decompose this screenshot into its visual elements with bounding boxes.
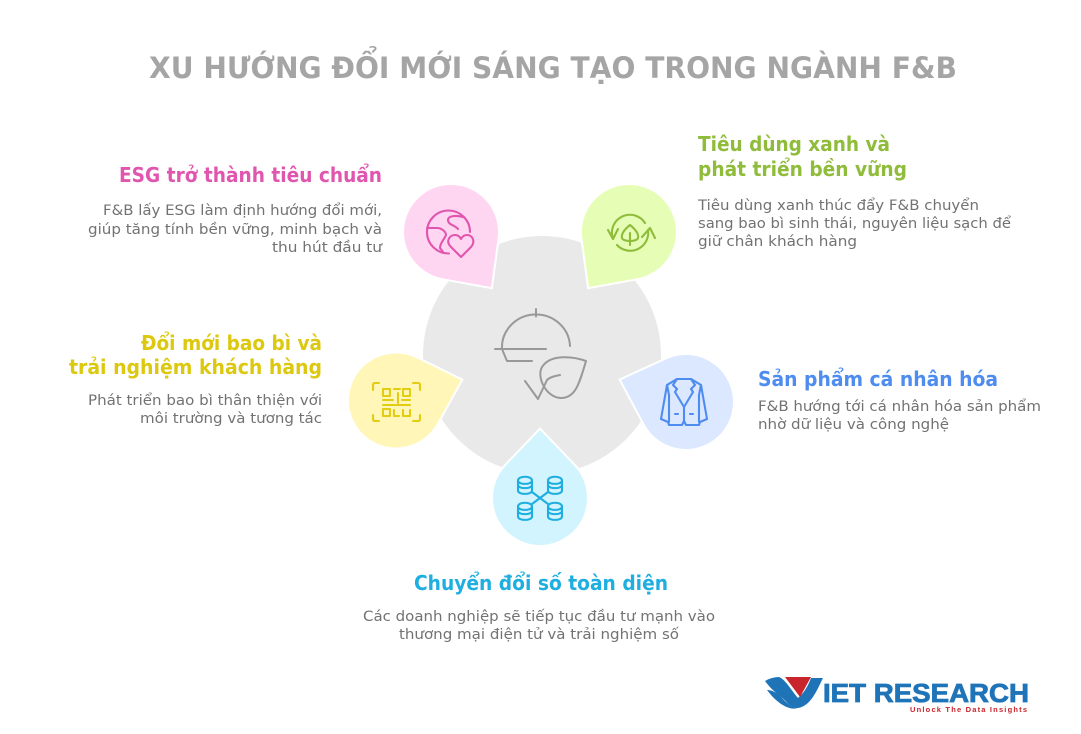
heading: Chuyển đổi số toàn diện [414, 571, 668, 595]
icon: QR code [373, 383, 420, 421]
logo wordmark: IET RESEARCH [823, 680, 1029, 708]
body text [697, 197, 1011, 250]
central grey circle [423, 236, 661, 474]
heading [69, 331, 322, 379]
heading: Tiêu dùng xanh và [698, 132, 890, 156]
body text [758, 398, 1041, 433]
body text: F&B lấy ESG làm định hướng đổi mới, [103, 202, 382, 219]
body text: giữ chân khách hàng [698, 234, 857, 250]
body text: giúp tăng tính bền vững, minh bạch và [88, 221, 382, 238]
body text [88, 392, 322, 427]
pink drop [404, 185, 498, 287]
heading: ESG trở thành tiêu chuẩn [119, 163, 382, 187]
heading: phát triển bền vững [698, 157, 907, 181]
panel: personalised products [621, 355, 1041, 449]
body text: môi trường và tương tác [140, 411, 322, 427]
yellow drop [349, 353, 461, 447]
green drop [582, 185, 676, 287]
body text: F&B hướng tới cá nhân hóa sản phẩm [758, 398, 1041, 415]
icon: globe with heart [427, 211, 473, 257]
title: XU HƯỚNG ĐỔI MỚI SÁNG TẠO TRONG NGÀNH F&B [149, 45, 957, 85]
logo mark [765, 677, 823, 709]
icon: connected databases [518, 477, 562, 520]
body text [88, 202, 383, 256]
cyan drop [493, 430, 587, 545]
heading: Đổi mới bao bì và [141, 331, 322, 355]
panel: green consumption [582, 132, 1011, 287]
panel: digital transformation [363, 430, 715, 643]
body text: Tiêu dùng xanh thúc đẩy F&B chuyển [697, 197, 979, 214]
body text: thương mại điện tử và trải nghiệm số [399, 626, 679, 643]
icon: cloche and leaf [495, 309, 586, 399]
logo: Viet Research [765, 677, 1029, 714]
body text: thu hút đầu tư [272, 240, 383, 256]
heading: trải nghiệm khách hàng [69, 355, 322, 379]
heading: Sản phẩm cá nhân hóa [758, 367, 998, 391]
body text: nhờ dữ liệu và công nghệ [758, 417, 949, 433]
blue drop [621, 355, 733, 449]
icon: recycling leaf [608, 215, 655, 251]
heading [698, 132, 907, 181]
logo tagline: Unlock The Data Insights [910, 705, 1027, 714]
icon: blazer [661, 379, 707, 425]
panel: ESG [88, 163, 498, 287]
panel: packaging [69, 331, 461, 447]
body text: sang bao bì sinh thái, nguyên liệu sạch để [698, 215, 1011, 232]
body text: Các doanh nghiệp sẽ tiếp tục đầu tư mạnh vào [363, 608, 715, 625]
body text [363, 608, 715, 643]
body text: Phát triển bao bì thân thiện với [88, 392, 322, 409]
